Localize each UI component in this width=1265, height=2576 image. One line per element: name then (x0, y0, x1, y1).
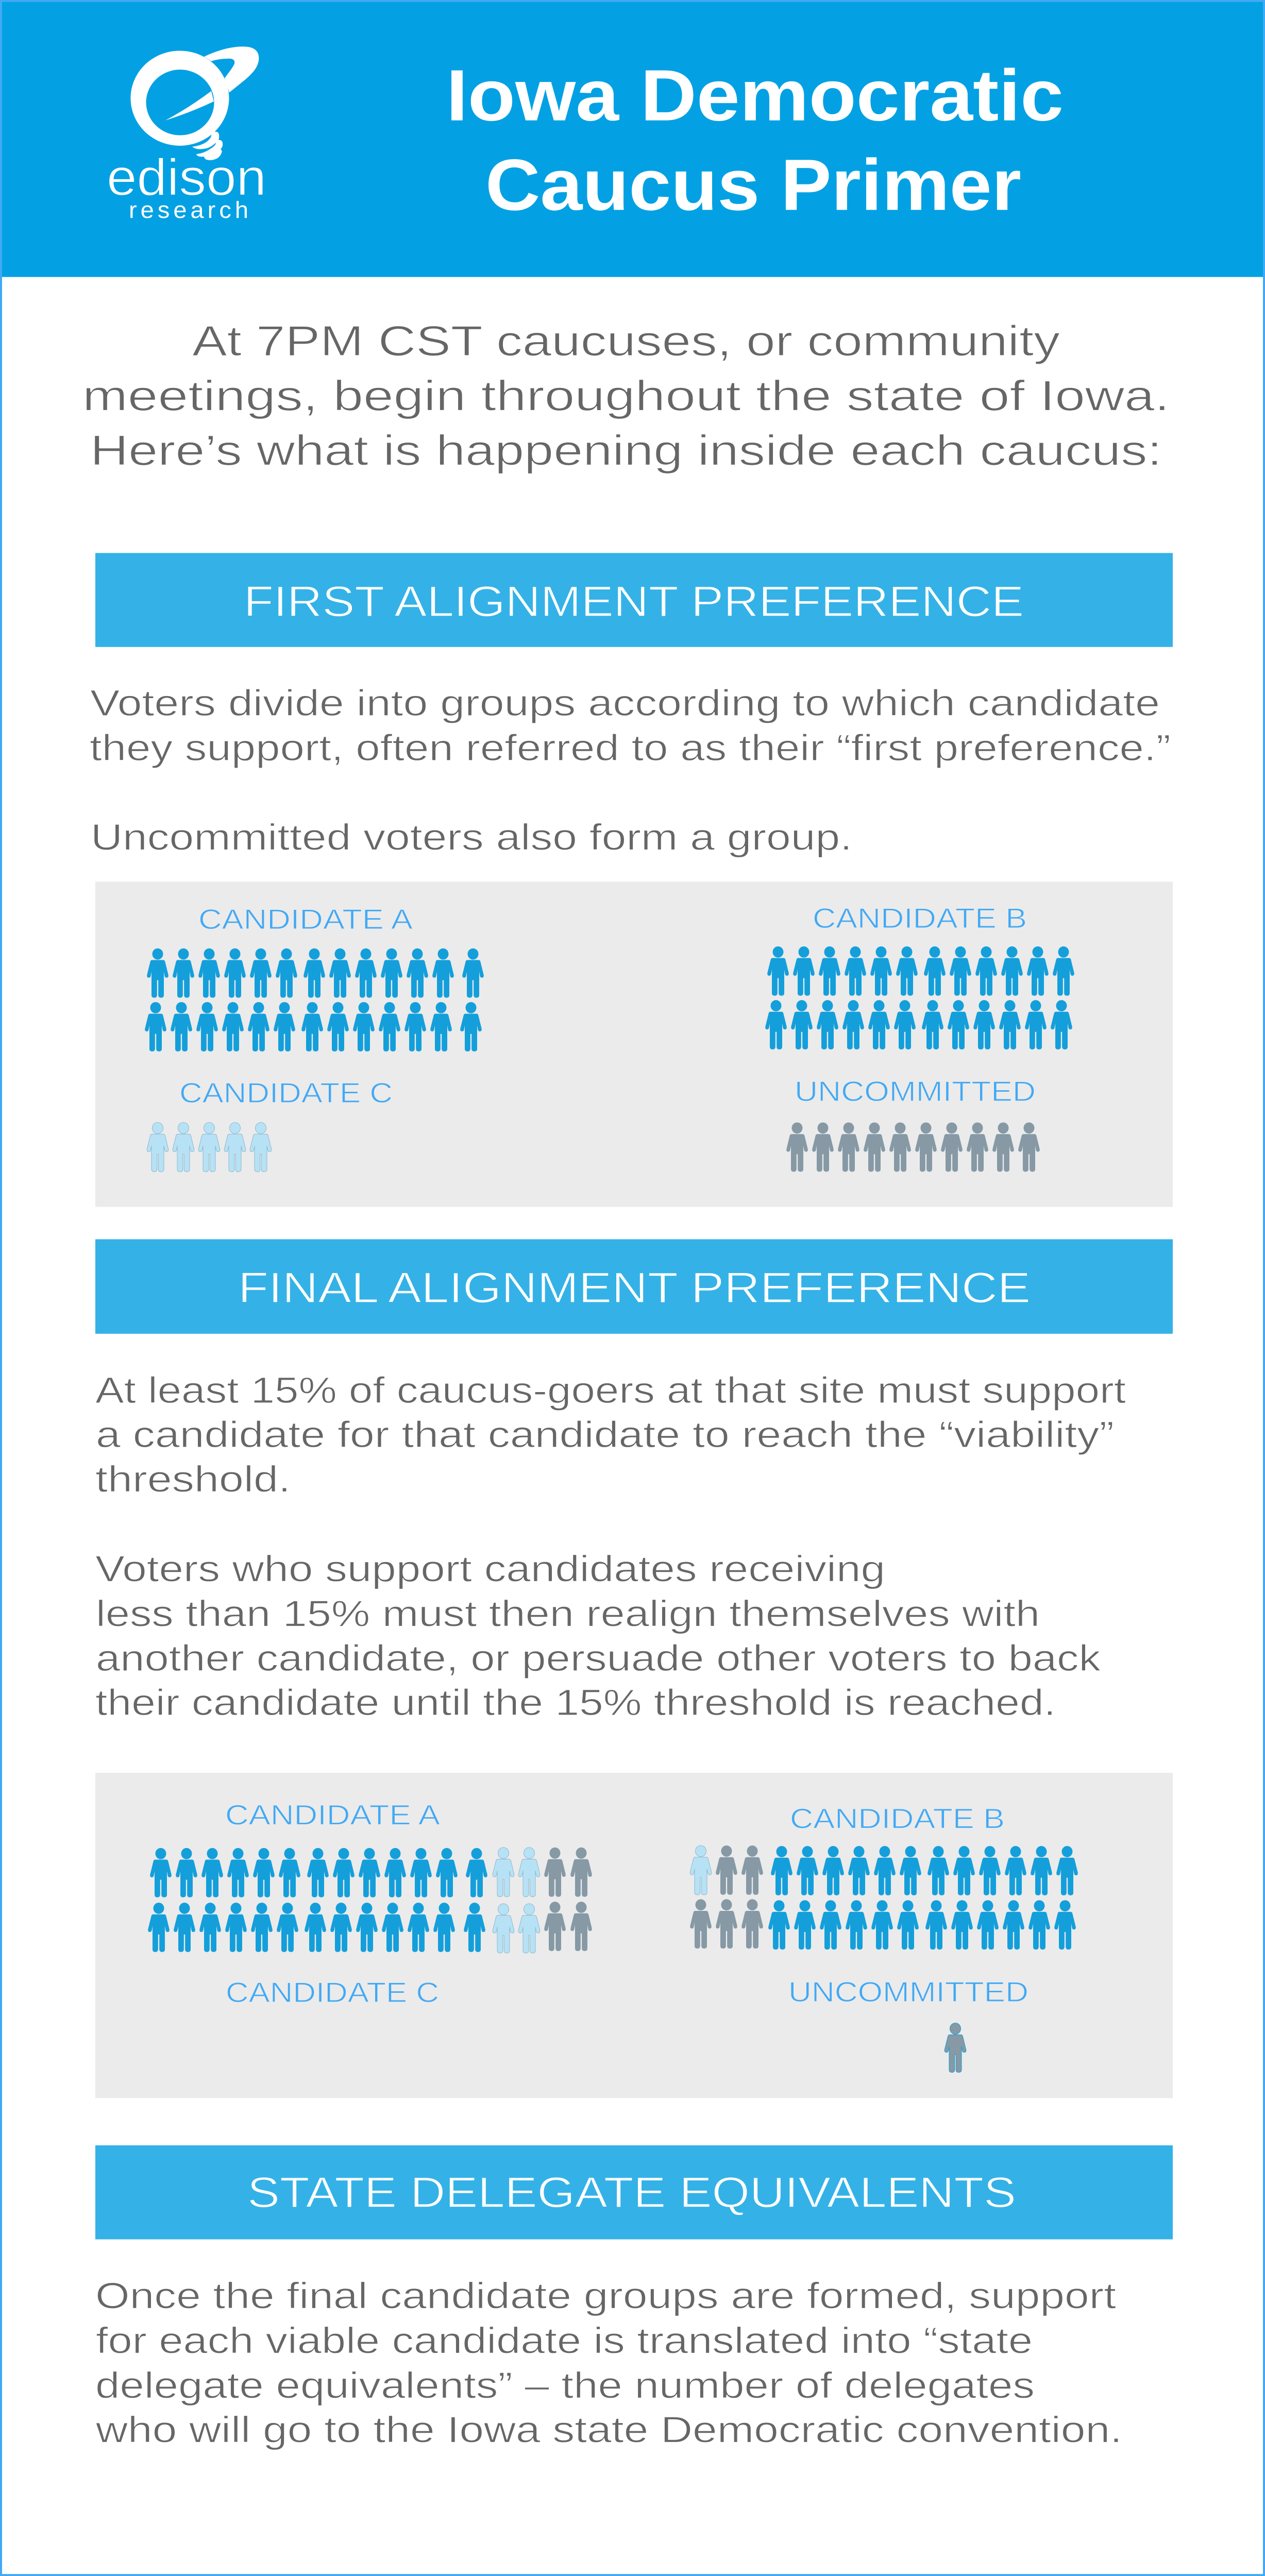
title: Caucus Primer (485, 145, 1021, 226)
text block: state delegate equivalents: Once the final candidate groups are formed, support (95, 2276, 1116, 2316)
label: candidate A: CANDIDATE A (198, 903, 413, 935)
heading bar: state delegate equivalents: STATE DELEGATE EQUIVALENTS (247, 2168, 1016, 2216)
text block: state delegate equivalents: for each viable candidate is translated into “state (96, 2320, 1033, 2361)
label: uncommitted: UNCOMMITTED (788, 1976, 1028, 2008)
label: candidate C: CANDIDATE C (226, 1976, 439, 2008)
people: uncommitted (786, 1123, 1040, 1172)
text block: first preference explanation (90, 683, 1171, 858)
logo: Edison Research (107, 46, 266, 223)
icon: light bulb planet (130, 46, 259, 160)
text block: viability threshold: a candidate for that candidate to reach the “viability” (96, 1414, 1114, 1455)
text block: realignment explanation: another candidate, or persuade other voters to back (96, 1638, 1101, 1679)
text block: realignment explanation (95, 1549, 1101, 1723)
label: candidate B: CANDIDATE B (790, 1802, 1005, 1834)
people: candidate B (765, 946, 1074, 1049)
label: candidate B: CANDIDATE B (813, 902, 1027, 934)
people: candidate B original supporters (768, 1846, 1078, 1950)
label: uncommitted: UNCOMMITTED (795, 1075, 1036, 1107)
label: candidate A: CANDIDATE A (225, 1799, 441, 1831)
heading bar: final alignment preference (95, 1239, 1173, 1334)
text block: realignment explanation: Voters who support candidates receiving (95, 1549, 885, 1589)
people: candidate A (145, 948, 484, 1052)
text block: first preference explanation: Uncommitted voters also form a group. (91, 817, 852, 858)
panel: first alignment groups (95, 882, 1173, 1207)
heading bar: first alignment preference: FIRST ALIGNMENT PREFERENCE (244, 578, 1024, 626)
intro text (82, 317, 1170, 474)
header band (0, 0, 1265, 277)
text block: viability threshold: At least 15% of caucus-goers at that site must support (95, 1370, 1126, 1411)
text block: first preference explanation: they support, often referred to as their “first preference.” (90, 727, 1171, 769)
person: remaining uncommitted (944, 2023, 966, 2072)
logo wordmark: edison (107, 148, 266, 206)
text block: realignment explanation: less than 15% must then realign themselves with (96, 1594, 1040, 1634)
intro text: At 7PM CST caucuses, or community (192, 317, 1060, 365)
intro text: meetings, begin throughout the state of Iowa. (82, 371, 1170, 419)
people: candidate B realigned from candidate C (690, 1845, 712, 1895)
heading bar: state delegate equivalents (95, 2145, 1173, 2240)
panel: final alignment groups (95, 1773, 1173, 2098)
people: candidate B realigned from uncommitted (690, 1845, 763, 1948)
title (446, 55, 1064, 226)
text block: state delegate equivalents: delegate equivalents” – the number of delegates (95, 2365, 1035, 2406)
text block: viability threshold: threshold. (95, 1459, 291, 1500)
people: candidate A original supporters (148, 1848, 487, 1952)
logo sub-wordmark: research (129, 197, 248, 223)
people: candidate C (147, 1123, 272, 1172)
text block: first preference explanation: Voters divide into groups according to which candidate (90, 683, 1160, 724)
text block: realignment explanation: their candidate until the 15% threshold is reached. (95, 1682, 1056, 1723)
heading bar: first alignment preference (95, 553, 1173, 647)
intro text: Here’s what is happening inside each caucus: (90, 426, 1162, 474)
text block: state delegate equivalents (95, 2276, 1122, 2450)
heading bar: final alignment preference: FINAL ALIGNMENT PREFERENCE (238, 1264, 1031, 1312)
people: candidate A realigned from uncommitted (544, 1848, 592, 1951)
label: candidate C: CANDIDATE C (179, 1077, 393, 1109)
title: Iowa Democratic (446, 55, 1064, 136)
text block: viability threshold (95, 1370, 1126, 1500)
people: candidate A realigned from candidate C (493, 1848, 540, 1953)
text block: state delegate equivalents: who will go to the Iowa state Democratic convention. (95, 2410, 1122, 2450)
